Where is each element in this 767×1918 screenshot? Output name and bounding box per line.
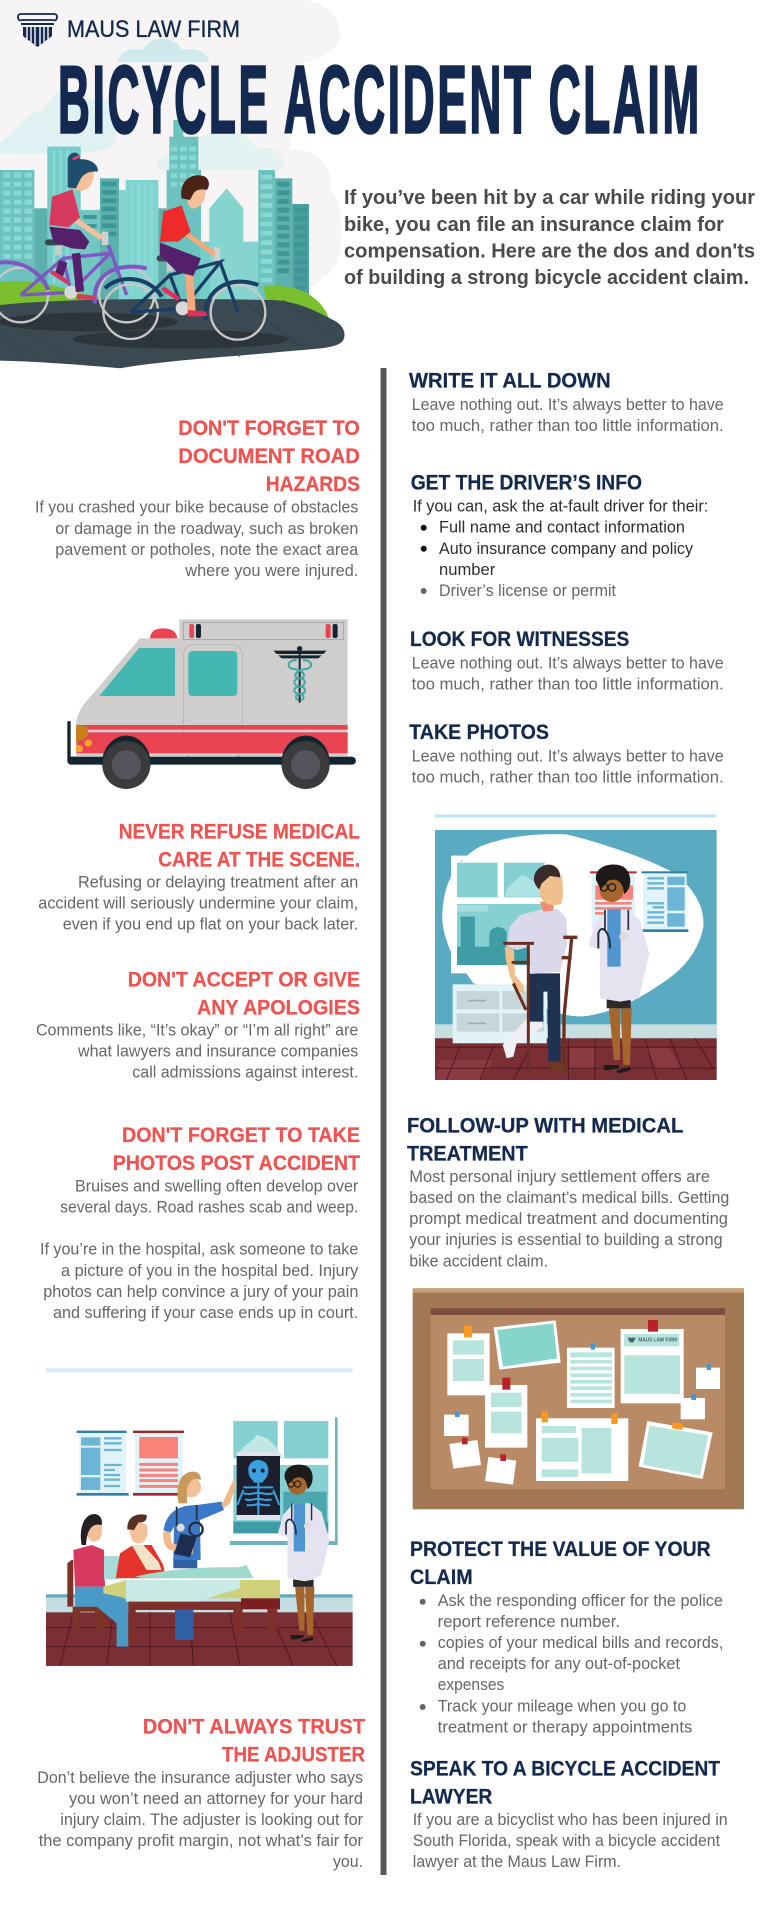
panel: don't always trust the adjuster: you won’t need an attorney for your hard <box>69 1790 363 1808</box>
panel: protect the value of your claim: Ask the responding officer for the police <box>438 1592 723 1610</box>
window <box>233 1421 278 1458</box>
chair and woman <box>67 1560 105 1630</box>
panel: take photos: Leave nothing out. It’s always better to have <box>412 747 724 765</box>
panel: speak to a bicycle accident lawyer: SPEAK TO A BICYCLE ACCIDENT <box>410 1757 720 1780</box>
panel: don't accept or give apologies: Comments like, “It’s okay” or “I’m all right” are <box>36 1022 358 1040</box>
panel: never refuse medical care <box>38 820 360 934</box>
posters <box>79 1433 126 1494</box>
illustration: hospital room with x-ray <box>46 1368 353 1666</box>
panel: never refuse medical care: even if you end up flat on your back later. <box>63 916 358 934</box>
illustration: patient on crutches with doctor <box>435 814 717 1080</box>
panel: don't forget to take photos: several days. Road rashes scab and weep. <box>60 1199 358 1217</box>
panel: follow-up with medical treatment: TREATMENT <box>407 1143 528 1166</box>
panel: protect the value of your claim: copies of your medical bills and records, <box>438 1634 723 1652</box>
panel: don't always trust the adjuster: Don’t believe the insurance adjuster who says <box>37 1769 363 1787</box>
panel: protect the value of your claim <box>410 1538 723 1736</box>
patient <box>104 1556 119 1579</box>
intro text <box>344 186 755 289</box>
panel: write it all down: WRITE IT ALL DOWN <box>409 370 611 393</box>
panel: don't accept or give apologies: DON'T ACCEPT OR GIVE <box>128 968 360 991</box>
panel: get the driver's info: GET THE DRIVER’S INFO <box>411 471 642 494</box>
doctor <box>588 864 649 1073</box>
header illustration: cyclists in city <box>0 0 345 368</box>
panel: don't forget to document road hazards: HAZARDS <box>266 473 360 496</box>
panel: follow-up with medical treatment: based on the claimant’s medical bills. Getting <box>409 1189 729 1207</box>
intro text: bike, you can file an insurance claim for <box>344 213 724 236</box>
panel: don't forget to document road hazards: If you crashed your bike because of obstacles <box>35 499 358 517</box>
panel: protect the value of your claim: treatment or therapy appointments <box>438 1718 692 1736</box>
man on crutches <box>503 865 577 1073</box>
panel: speak to a bicycle accident lawyer <box>410 1757 728 1871</box>
panel: don't forget to take photos: photos can help convince a jury of your pain <box>43 1283 358 1301</box>
panel: don't forget to take photos: Bruises and swelling often develop over <box>75 1178 359 1196</box>
panel: get the driver's info <box>411 471 708 600</box>
panel: don't forget to take photos: a picture of you in the hospital bed. Injury <box>61 1262 359 1280</box>
panel: get the driver's info: Driver’s license or permit <box>439 582 616 600</box>
panel: write it all down: too much, rather than too little information. <box>412 417 724 435</box>
panel: don't accept or give apologies: what lawyers and insurance companies <box>77 1043 358 1061</box>
panel: write it all down: Leave nothing out. It’s always better to have <box>412 396 724 414</box>
panel: don't always trust the adjuster: DON'T ALWAYS TRUST <box>143 1715 365 1738</box>
doctor <box>278 1465 329 1642</box>
illustration: corkboard with notes <box>413 1288 744 1509</box>
panel: don't forget to document road hazards: DOCUMENT ROAD <box>178 445 360 468</box>
panel: write it all down <box>409 370 724 435</box>
panel: get the driver's info: number <box>439 561 496 579</box>
panel: don't forget to take photos: PHOTOS POST ACCIDENT <box>113 1152 360 1175</box>
panel: don't forget to document road hazards: pavement or potholes, note the exact area <box>55 541 359 559</box>
panel: don't accept or give apologies: call admissions against interest. <box>132 1064 358 1082</box>
panel: don't always trust the adjuster: the company profit margin, not what’s fair for <box>39 1832 364 1850</box>
panel: take photos <box>409 721 724 786</box>
wall charts <box>592 873 635 930</box>
panel: follow-up with medical treatment: your injuries is essential to building a strong <box>409 1231 723 1249</box>
panel: don't forget to document road hazards: DON'T FORGET TO <box>178 417 360 440</box>
panel: take photos: too much, rather than too little information. <box>412 768 724 786</box>
navy bicycle and man <box>103 175 265 340</box>
window <box>451 856 548 973</box>
panel: don't forget to document road hazards: or damage in the roadway, such as broken <box>55 520 358 538</box>
panel: don't always trust the adjuster: THE ADJUSTER <box>222 1743 365 1766</box>
panel: don't forget to take photos: DON'T FORGET TO TAKE <box>122 1124 360 1147</box>
panel: protect the value of your claim: CLAIM <box>410 1566 473 1589</box>
panel: protect the value of your claim: expenses <box>438 1676 504 1694</box>
bed <box>103 1580 280 1598</box>
panel: never refuse medical care: accident will seriously undermine your claim, <box>38 895 358 913</box>
panel: never refuse medical care: Refusing or delaying treatment after an <box>78 874 358 892</box>
panel: look for witnesses <box>410 628 724 693</box>
panel: don't accept or give apologies: ANY APOLOGIES <box>197 996 360 1019</box>
panel: speak to a bicycle accident lawyer: LAWYER <box>410 1785 492 1808</box>
panel: look for witnesses: too much, rather than too little information. <box>412 675 724 693</box>
intro text: compensation. Here are the dos and don'ts <box>344 240 755 262</box>
panel: get the driver's info: Full name and contact information <box>439 519 685 537</box>
panel: look for witnesses: LOOK FOR WITNESSES <box>410 628 629 651</box>
panel: speak to a bicycle accident lawyer: If you are a bicyclist who has been injured in <box>413 1811 728 1829</box>
panel: don't forget to take photos <box>40 1124 360 1322</box>
icon: ambulance <box>67 619 356 789</box>
panel: follow-up with medical treatment: Most personal injury settlement offers are <box>409 1168 710 1186</box>
panel: don't always trust the adjuster: you. <box>333 1853 363 1871</box>
panel: follow-up with medical treatment: FOLLOW-UP WITH MEDICAL <box>407 1115 683 1138</box>
panel: don't always trust the adjuster: injury claim. The adjuster is looking out for <box>60 1811 363 1829</box>
purple bicycle and woman <box>0 152 154 322</box>
panel: look for witnesses: Leave nothing out. It’s always better to have <box>412 654 724 672</box>
panel: speak to a bicycle accident lawyer: lawyer at the Maus Law Firm. <box>413 1853 621 1871</box>
panel: get the driver's info: Auto insurance company and policy <box>439 540 694 558</box>
center divider bar <box>380 368 386 1875</box>
panel: speak to a bicycle accident lawyer: South Florida, speak with a bicycle accident <box>413 1832 720 1850</box>
panel: don't forget to document road hazards: where you were injured. <box>184 562 358 580</box>
panel: never refuse medical care: NEVER REFUSE MEDICAL <box>119 820 360 843</box>
panel: don't forget to take photos: and suffering if your case ends up in court. <box>53 1304 358 1322</box>
firm name: MAUS LAW FIRM <box>67 16 240 43</box>
panel: protect the value of your claim: Track your mileage when you go to <box>438 1697 686 1715</box>
illustration: corkboard with notes: MAUS LAW FIRM <box>638 1338 677 1344</box>
x-ray <box>237 1452 280 1520</box>
panel: don't forget to take photos: If you’re in the hospital, ask someone to take <box>40 1241 358 1259</box>
panel: protect the value of your claim: PROTECT THE VALUE OF YOUR <box>410 1538 711 1561</box>
intro text: of building a strong bicycle accident claim. <box>344 266 749 289</box>
panel: take photos: TAKE PHOTOS <box>409 721 549 744</box>
panel: follow-up with medical treatment <box>407 1115 729 1270</box>
panel: protect the value of your claim: and receipts for any out-of-pocket <box>438 1655 680 1673</box>
logo: column icon <box>18 14 57 47</box>
panel: follow-up with medical treatment: bike accident claim. <box>409 1252 548 1270</box>
cabinet <box>453 984 547 1043</box>
panel: never refuse medical care: CARE AT THE SCENE. <box>158 848 360 871</box>
panel: don't forget to document road hazards <box>35 417 360 580</box>
panel: don't accept or give apologies <box>36 968 360 1082</box>
panel: get the driver's info: If you can, ask the at-fault driver for their: <box>413 498 708 516</box>
nurse <box>175 1609 193 1640</box>
panel: protect the value of your claim: report reference number. <box>438 1613 620 1631</box>
panel: follow-up with medical treatment: prompt medical treatment and documenting <box>409 1210 728 1228</box>
panel: don't always trust the adjuster <box>37 1715 365 1871</box>
intro text: If you’ve been hit by a car while riding your <box>344 186 755 209</box>
